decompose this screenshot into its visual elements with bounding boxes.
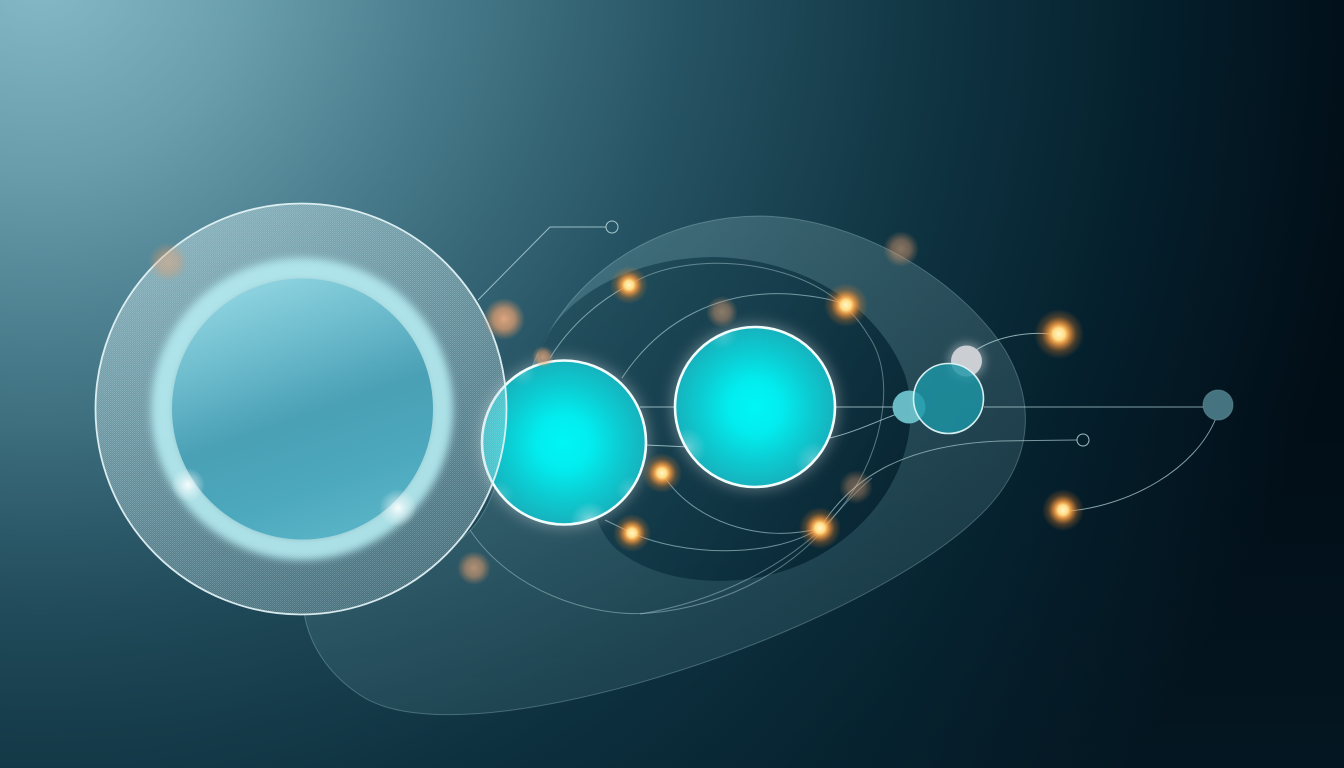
centre cyan cell bbox=[666, 317, 838, 490]
orange glow nodes bbox=[610, 266, 1084, 552]
translucent blob: lower large shape bbox=[304, 216, 1025, 715]
right terminal node bbox=[1203, 390, 1233, 420]
inner disc bbox=[172, 278, 433, 540]
dim orange glows bbox=[148, 231, 919, 585]
connector lines bbox=[478, 227, 1216, 614]
thin outline curve under the cells bbox=[470, 263, 884, 614]
left cyan cell bbox=[479, 358, 649, 542]
large glass cell bbox=[95, 203, 507, 615]
translucent dark inner shape bbox=[538, 257, 911, 581]
glowing inner ring bbox=[163, 270, 441, 548]
small ring terminal: top bbox=[606, 221, 618, 233]
pale small cell bbox=[892, 390, 926, 424]
small teal cell bbox=[914, 364, 984, 434]
translucent shapes behind cells bbox=[304, 216, 1025, 715]
small ring terminal: right bbox=[1077, 434, 1089, 446]
grey-white node bbox=[948, 342, 986, 380]
